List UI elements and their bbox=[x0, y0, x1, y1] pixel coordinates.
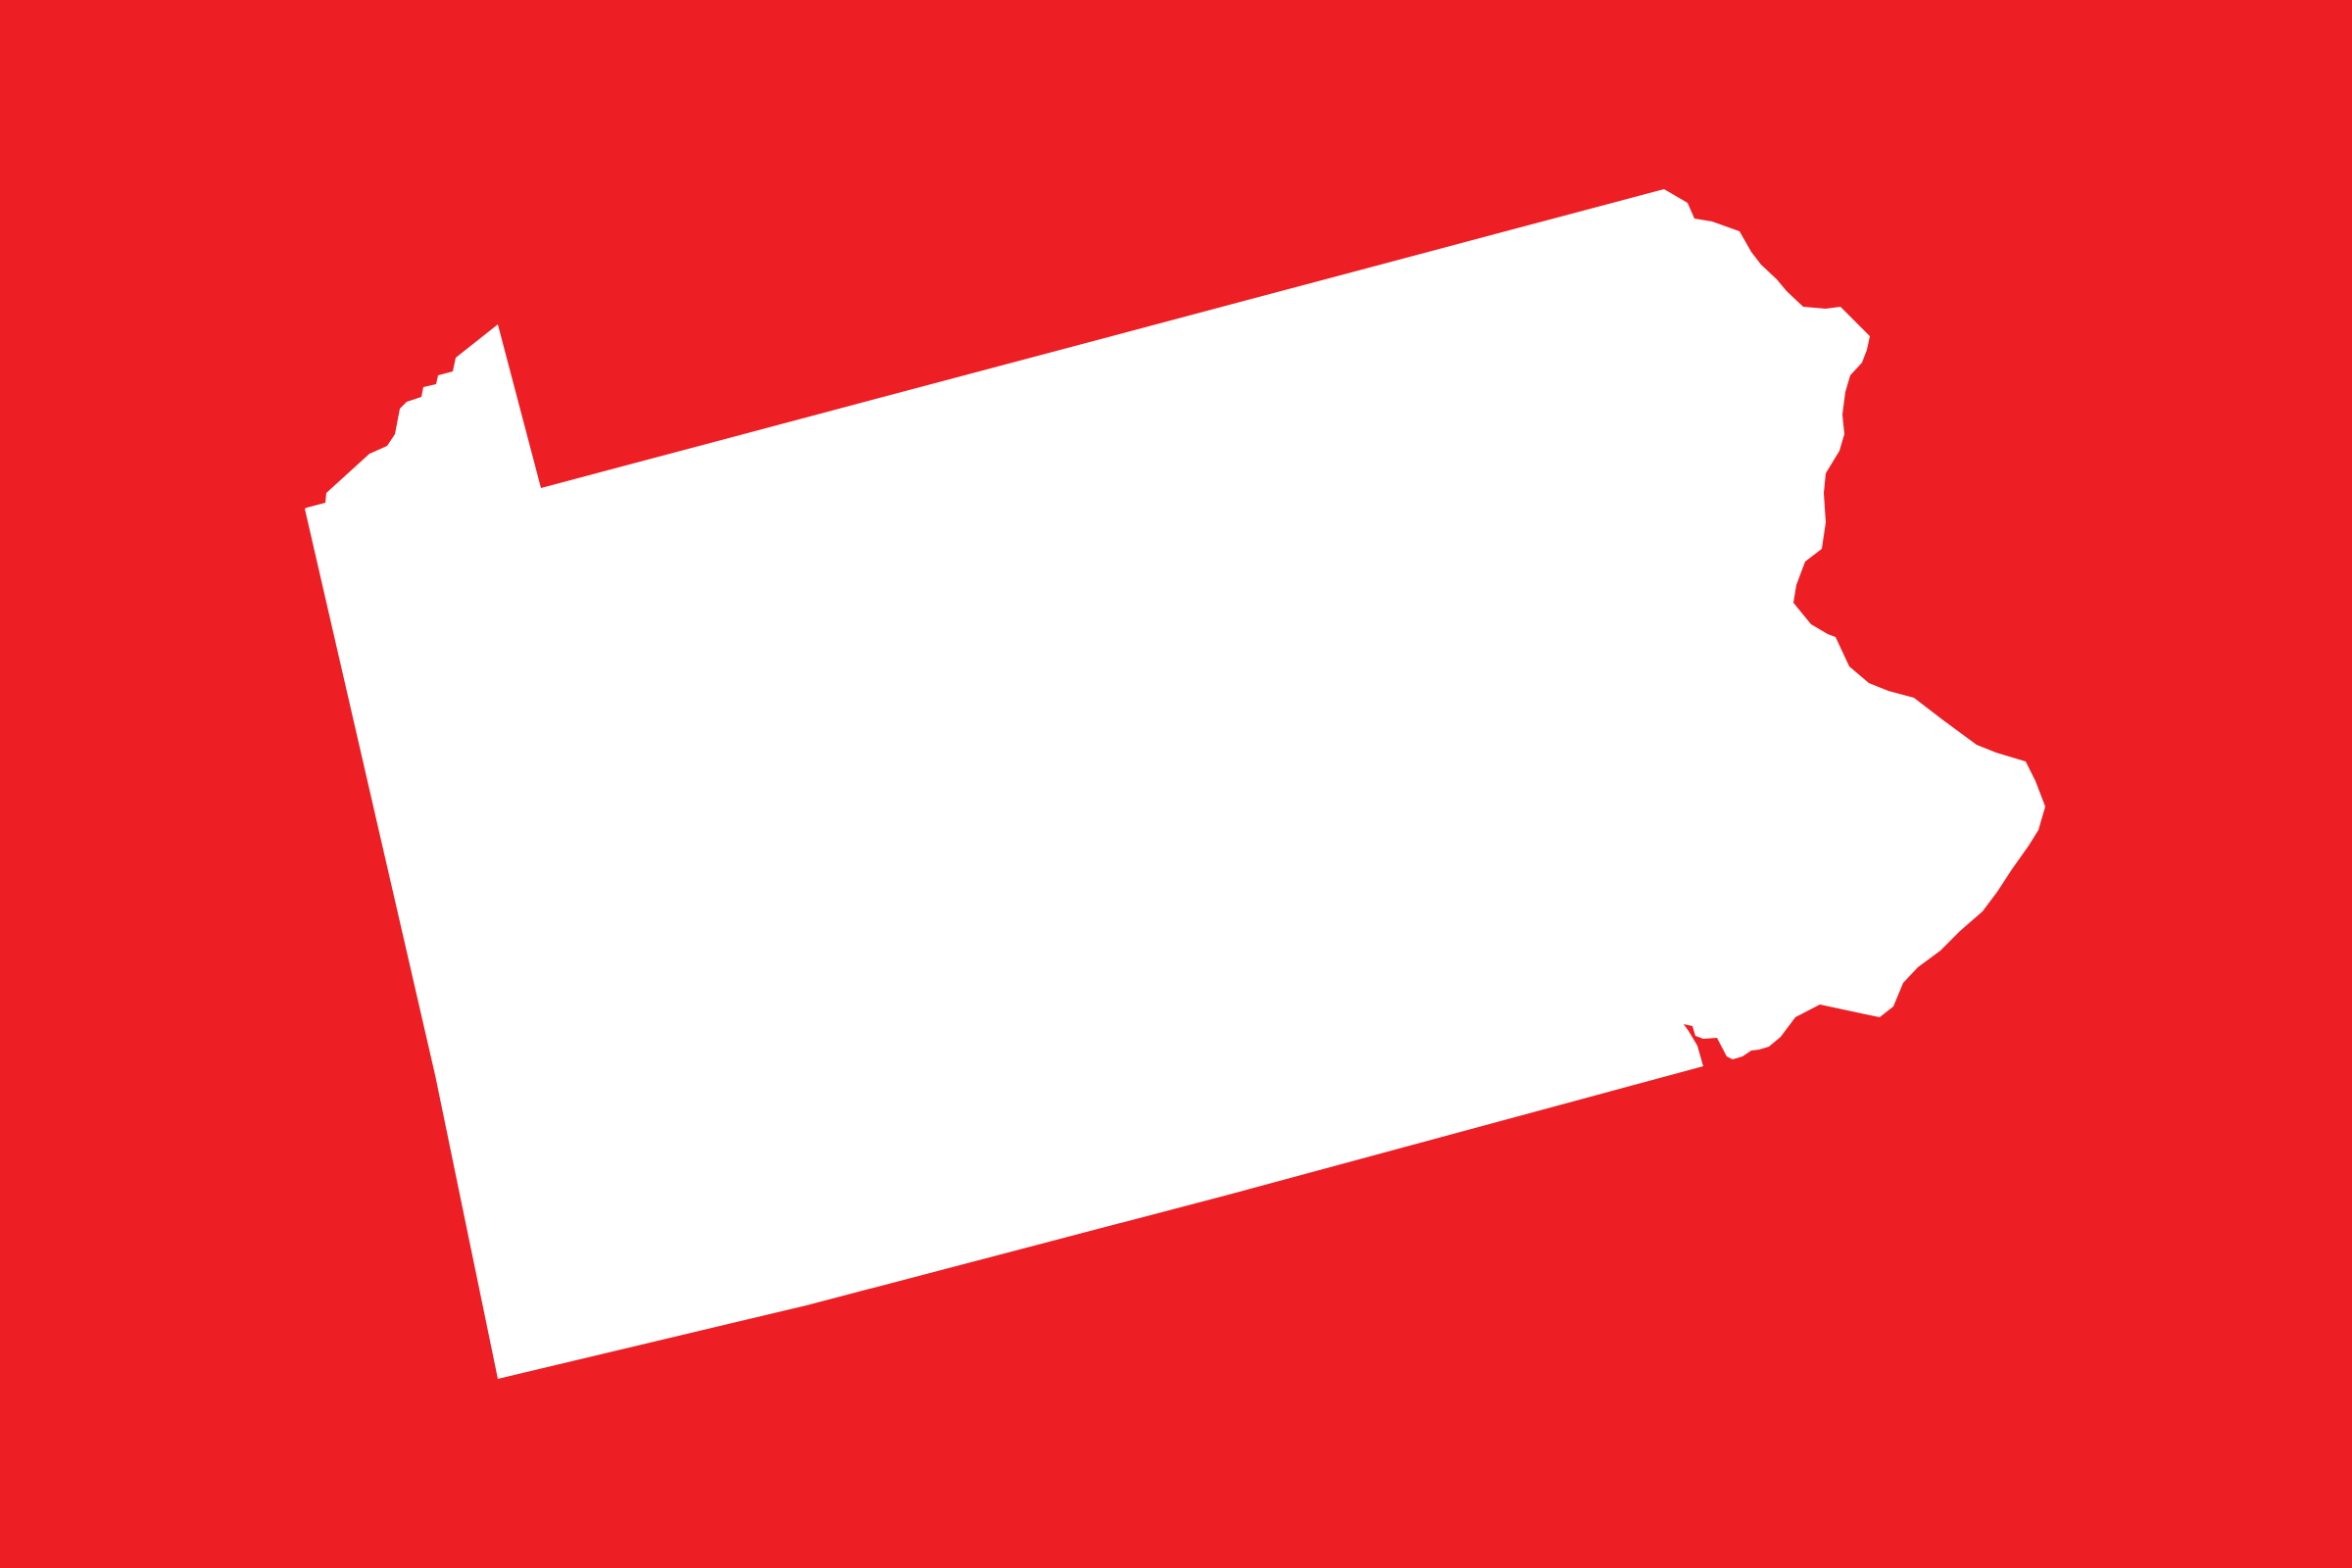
state shape: Pennsylvania bbox=[305, 189, 2045, 1379]
